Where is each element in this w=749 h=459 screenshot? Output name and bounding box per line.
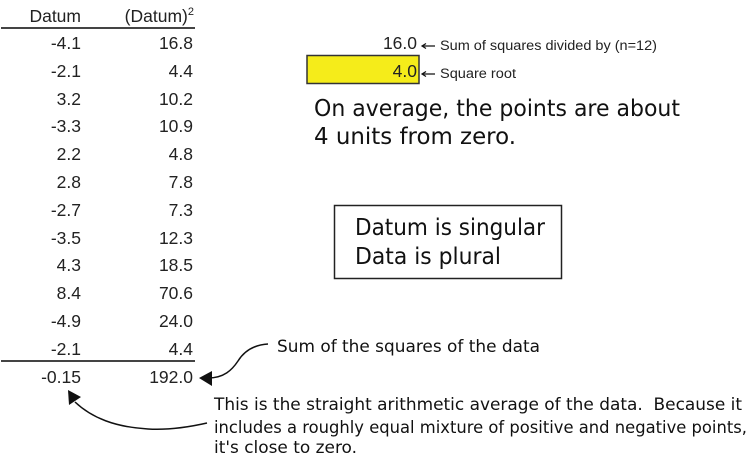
total: sum of squares: 192.0: [149, 367, 193, 387]
column: datum values: -4.1: [51, 33, 81, 53]
text block: interpretation: On average, the points are about: [314, 96, 680, 122]
callout box: datum vs data: Data is plural: [355, 244, 501, 270]
column: squared values: [159, 33, 193, 359]
highlighted cell: square root value: [307, 56, 419, 84]
annotation: arithmetic average explanation: it's close to zero.: [214, 438, 357, 458]
total rule: [1, 360, 195, 362]
column: squared values: 7.8: [169, 172, 193, 192]
table: data and squares: [1, 6, 195, 387]
column: squared values: 7.3: [169, 200, 193, 220]
header rule: [1, 27, 195, 29]
column: squared values: 16.8: [159, 33, 193, 53]
total: average of data: -0.15: [41, 367, 81, 387]
column: datum values: -2.1: [51, 339, 81, 359]
callout box: datum vs data: Datum is singular: [355, 215, 546, 241]
column: datum values: -2.7: [51, 200, 81, 220]
column: squared values: 10.9: [159, 116, 193, 136]
column: datum values: 3.2: [57, 89, 81, 109]
column header: Datum: Datum: [29, 6, 81, 26]
text block: interpretation: [314, 96, 680, 150]
annotation: arithmetic average explanation: [213, 395, 747, 458]
arrow: explanation to average: [68, 390, 207, 429]
callout box: datum vs data: [334, 206, 562, 278]
arrow: to variance: [422, 44, 435, 48]
arrow: sum label to total: [199, 344, 268, 386]
column header: Datum squared: (Datum): [125, 6, 188, 26]
column: datum values: 4.3: [57, 255, 81, 275]
column: squared values: 24.0: [159, 311, 193, 331]
label: sum of squares divided by n: Sum of squares divided by (n=12): [440, 38, 657, 54]
annotation: sum of squares label: Sum of the squares of the data: [277, 337, 540, 357]
annotation: arithmetic average explanation: This is the straight arithmetic average of the data. Because it: [213, 395, 742, 415]
column: squared values: 70.6: [159, 283, 193, 303]
column: datum values: 2.2: [57, 144, 81, 164]
column: datum values: -4.9: [51, 311, 81, 331]
text block: interpretation: 4 units from zero.: [314, 124, 516, 150]
column: squared values: 4.4: [169, 339, 193, 359]
column: datum values: -3.5: [51, 228, 81, 248]
arrow: to square root: [422, 72, 435, 76]
column: squared values: 18.5: [159, 255, 193, 275]
column: squared values: 10.2: [159, 89, 193, 109]
column: squared values: 4.4: [169, 61, 193, 81]
column: datum values: -3.3: [51, 116, 81, 136]
column: squared values: 4.8: [169, 144, 193, 164]
column: datum values: 8.4: [57, 283, 81, 303]
column: datum values: -2.1: [51, 61, 81, 81]
column header: Datum squared: 2: [188, 6, 194, 18]
highlighted cell: square root value: 4.0: [393, 61, 417, 81]
result: variance value: 16.0: [383, 33, 417, 53]
column: squared values: 12.3: [159, 228, 193, 248]
label: square root: Square root: [440, 66, 516, 82]
column: datum values: 2.8: [57, 172, 81, 192]
column: datum values: [51, 33, 81, 359]
